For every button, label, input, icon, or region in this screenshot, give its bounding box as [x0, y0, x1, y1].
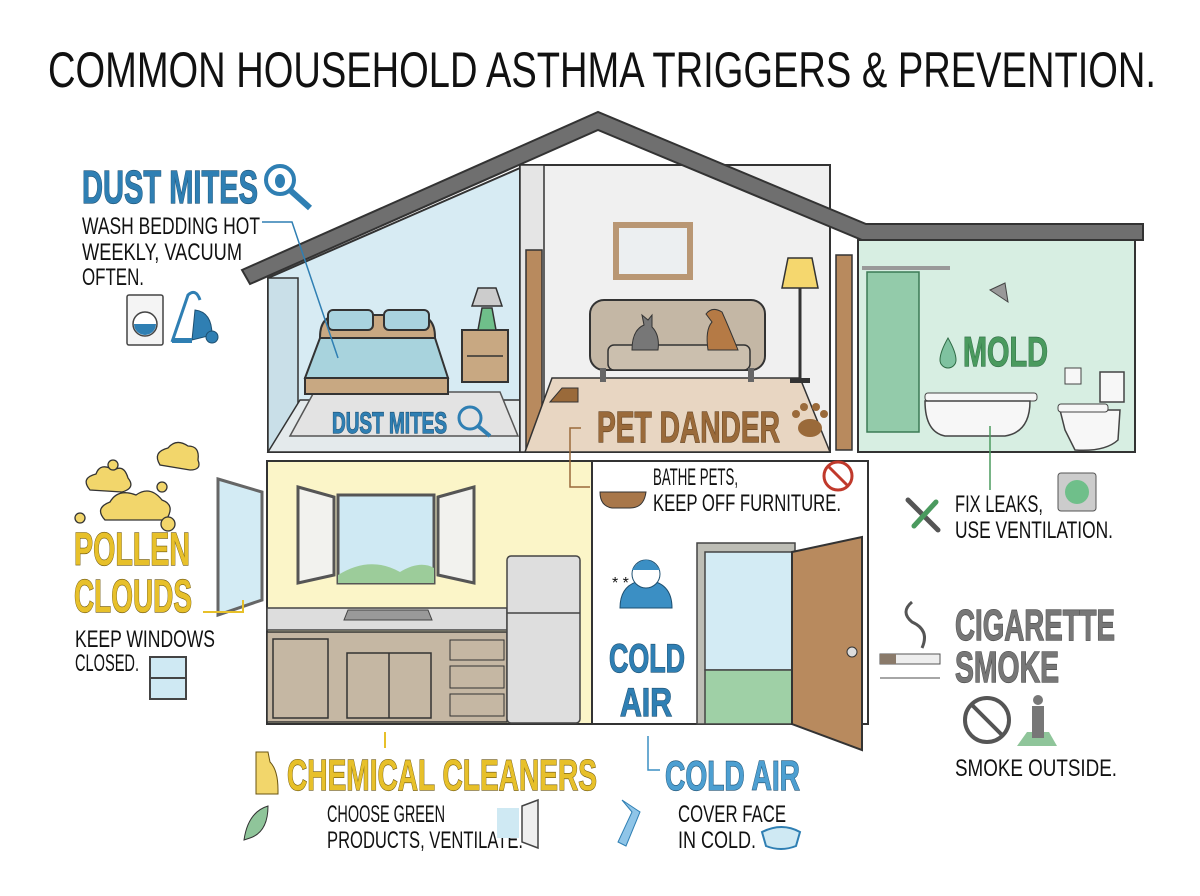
arrow: pet dander — [570, 428, 590, 487]
icon: magnifier — [266, 166, 310, 208]
icon: washer and vacuum — [127, 292, 218, 345]
roof — [242, 112, 1143, 284]
arrow: chemical cleaners — [384, 732, 386, 748]
label: cold air in hall — [609, 560, 685, 725]
text: dust mites advice: WASH BEDDING HOT — [82, 213, 260, 240]
heading: chemical cleaners: CHEMICAL CLEANERS — [287, 751, 597, 800]
heading: dust mites: DUST MITES — [82, 161, 258, 213]
panel: kitchen — [267, 461, 592, 724]
text: mold advice: FIX LEAKS, — [955, 491, 1043, 518]
label: cold air in hall: * * — [612, 575, 629, 592]
label: mold — [940, 328, 1048, 375]
text: dust mites advice: WEEKLY, VACUUM — [82, 239, 242, 266]
text: smoke advice: SMOKE OUTSIDE. — [955, 755, 1117, 782]
panel: living room — [520, 165, 852, 452]
arrow: pollen — [203, 600, 243, 612]
text: chemical cleaners advice — [244, 800, 538, 854]
text: smoke advice — [955, 695, 1117, 782]
arrow: cold air — [648, 736, 660, 770]
arrow: mold — [989, 426, 991, 490]
text: cold air advice: IN COLD. — [678, 827, 756, 854]
text: cold air advice: COVER FACE — [678, 801, 786, 828]
label: cold air in hall: AIR — [620, 681, 672, 725]
heading: cigarette smoke: SMOKE — [955, 643, 1059, 692]
text: dust mites advice — [82, 213, 260, 291]
arrow: dust mites to bed — [262, 222, 338, 358]
text: chemical cleaners advice: CHOOSE GREEN — [327, 801, 445, 828]
text: mold advice — [908, 473, 1113, 544]
text: pet dander advice — [600, 462, 852, 517]
text: pet dander advice: BATHE PETS, — [653, 464, 738, 491]
icon: open window — [218, 479, 262, 615]
label: dust mites on rug: DUST MITES — [332, 407, 447, 440]
text: mold advice: USE VENTILATION. — [955, 517, 1113, 544]
text: pet dander advice: KEEP OFF FURNITURE. — [653, 490, 841, 517]
text: chemical cleaners advice: PRODUCTS, VENTILATE. — [327, 827, 523, 854]
text: pollen advice: CLOSED. — [75, 650, 139, 677]
label: pet dander: PET DANDER — [597, 403, 780, 452]
text: cold air advice — [618, 800, 800, 854]
label: pollen clouds: CLOUDS — [74, 570, 192, 622]
text: pollen advice — [75, 626, 215, 699]
label: cold air in hall: COLD — [609, 637, 685, 681]
house structure — [242, 112, 1143, 750]
label: pollen clouds — [74, 442, 245, 622]
heading: cigarette smoke — [880, 601, 1115, 692]
label: pollen clouds: POLLEN — [74, 523, 190, 575]
text: dust mites advice: OFTEN. — [82, 264, 144, 291]
heading: cold air: COLD AIR — [665, 752, 800, 799]
panel: bathroom — [858, 240, 1135, 452]
arrow: cigarette smoke — [880, 677, 940, 679]
label: mold: MOLD — [963, 328, 1048, 375]
text: pollen advice: KEEP WINDOWS — [75, 626, 215, 653]
panel: bedroom — [268, 168, 520, 452]
panel: hallway — [592, 461, 868, 750]
heading: chemical cleaners — [256, 751, 597, 800]
